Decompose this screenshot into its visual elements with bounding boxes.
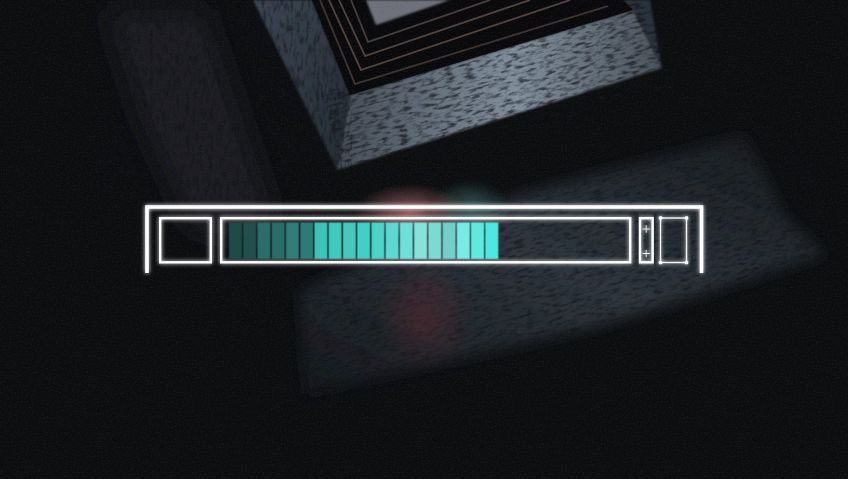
progress bar widget [147, 207, 702, 273]
upper left stone wall [253, 0, 350, 170]
outer bracket frame [147, 207, 702, 273]
stepped recess [312, 0, 633, 95]
plus button box [640, 218, 653, 262]
upper lit stone face [337, 10, 662, 170]
progress track [221, 218, 630, 262]
wall mortar texture [90, 0, 352, 200]
selection box with corner handles [659, 216, 688, 264]
lower face mortar texture [280, 113, 840, 407]
lower lit brick face [300, 135, 825, 395]
empty square box [160, 218, 211, 262]
red wall reflection [377, 257, 473, 373]
teal lens glow [430, 180, 510, 236]
left dark wall [105, 10, 270, 240]
progress segments [229, 222, 498, 259]
upper face mortar texture [321, 0, 673, 180]
upper right stone wall [623, 0, 662, 68]
top skylight stone [366, 0, 450, 25]
pink lens glow [354, 184, 466, 240]
